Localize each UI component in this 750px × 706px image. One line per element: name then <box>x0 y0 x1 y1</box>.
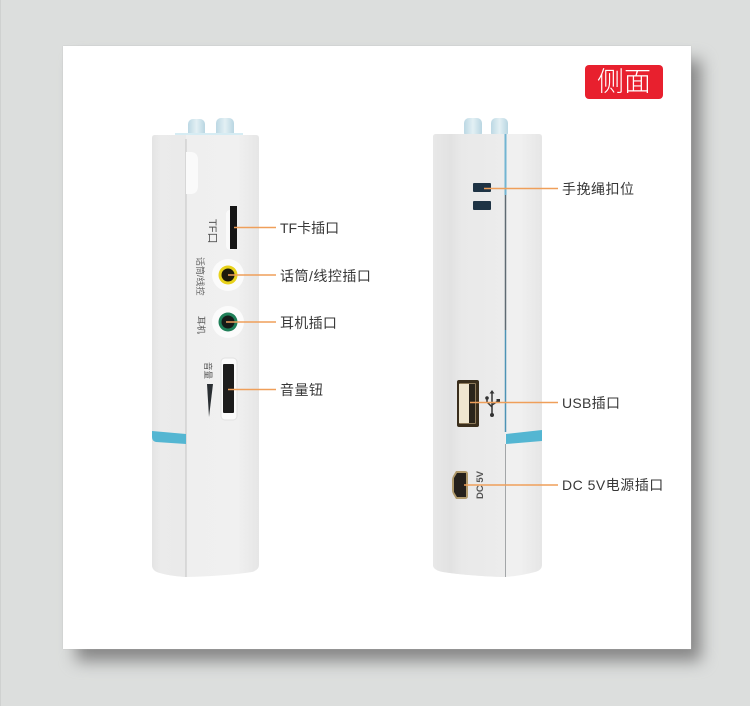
device body <box>152 135 259 577</box>
earphone label: 耳机 <box>196 316 207 334</box>
label: volume knob: 音量钮 <box>280 382 324 398</box>
label: USB port: USB插口 <box>562 395 620 411</box>
strap slots <box>473 183 491 210</box>
volume wheel <box>221 358 237 420</box>
badge: side view heading: 侧面 <box>597 67 651 97</box>
earphone jack <box>212 306 244 338</box>
label: earphone port: 耳机插口 <box>280 315 337 331</box>
USB port <box>457 380 479 427</box>
mini USB port <box>452 471 468 499</box>
seam line <box>504 134 506 577</box>
microphone label: 话筒/线控 <box>195 257 206 296</box>
icon: USB trident <box>485 390 500 417</box>
label: DC power port: DC 5V电源插口 <box>562 477 664 493</box>
TF port label: TF口 <box>206 219 218 243</box>
white card panel <box>63 46 691 649</box>
label: microphone port: 话筒/线控插口 <box>280 268 371 284</box>
leader lines <box>226 188 558 485</box>
badge: side view heading <box>585 65 663 99</box>
left device: front side with ports <box>152 118 259 577</box>
right device: rear side with ports <box>433 118 542 577</box>
microphone jack <box>212 259 244 291</box>
DC 5V label: DC 5V <box>475 470 486 499</box>
device body <box>433 134 542 577</box>
teal band <box>152 431 186 444</box>
label: strap hole: 手挽绳扣位 <box>562 181 634 197</box>
TF slot <box>226 206 237 250</box>
label: TF card slot: TF卡插口 <box>280 220 339 236</box>
top buttons <box>188 118 234 139</box>
volume wedge <box>207 384 213 417</box>
side window <box>186 152 198 194</box>
top buttons <box>464 118 508 138</box>
volume label: 音量 <box>203 362 213 380</box>
teal band <box>506 430 542 444</box>
card drop shadow <box>76 60 701 661</box>
